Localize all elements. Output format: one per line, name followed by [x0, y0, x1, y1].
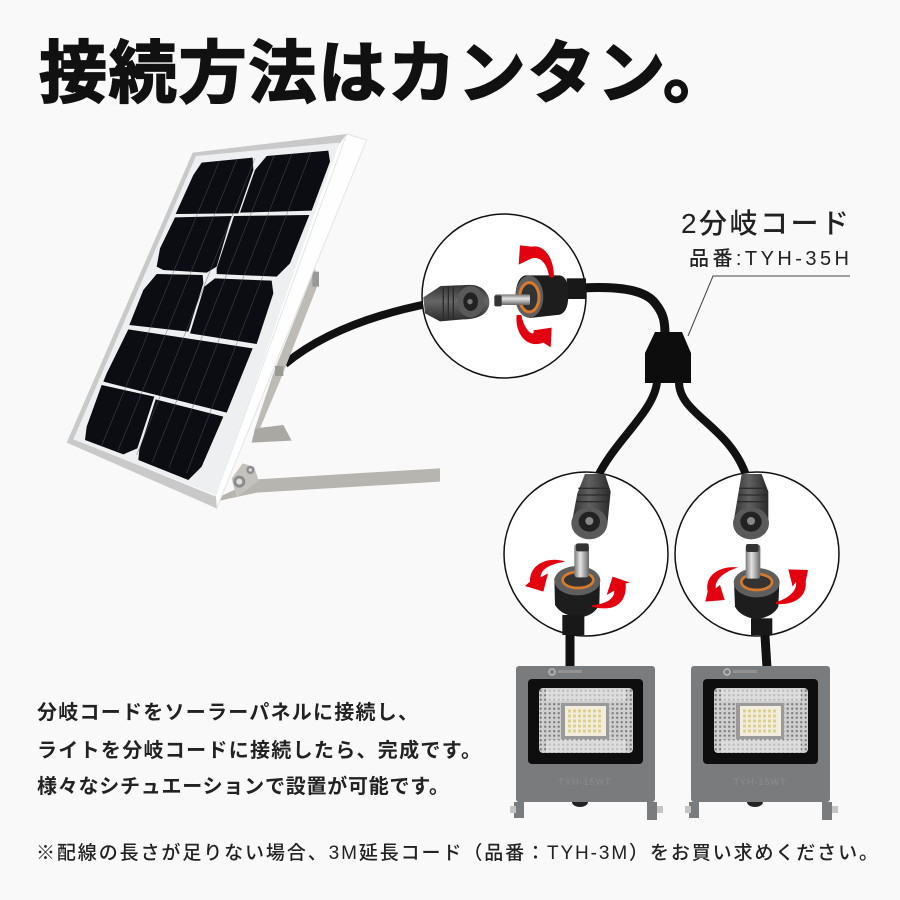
label: splitter cord: 2分岐コード: [681, 208, 849, 239]
solar panel on stand: [67, 134, 440, 508]
icon: socket connector: [423, 285, 489, 321]
icon: rotate arrow: [592, 577, 630, 608]
floodlight left: [510, 666, 663, 820]
solar cells: [85, 151, 330, 480]
stand: [220, 268, 440, 501]
cable: right branch: [679, 382, 747, 478]
cable: panel to first connector: [285, 303, 432, 364]
icon: rotate arrow: [776, 569, 808, 604]
frame: [67, 134, 367, 508]
description text: [37, 701, 481, 798]
icon: rotate arrow: [525, 560, 565, 592]
icon: socket connector: [733, 474, 769, 539]
icon: plug connector: [554, 543, 600, 635]
icon: plug connector: [494, 275, 586, 318]
icon: rotate arrow down: [516, 315, 552, 347]
icon: plug connector: [734, 544, 780, 635]
cable: connector to splitter: [582, 288, 665, 336]
icon: rotate arrow: [705, 567, 738, 602]
icon: rotate arrow up: [519, 245, 554, 277]
detail circle: right light connection: [675, 472, 839, 636]
detail circle: panel connection: [422, 214, 586, 378]
title: 接続方法はカンタン。: [39, 36, 731, 112]
cell grid lines: [102, 152, 311, 473]
description text: 分岐コードをソーラーパネルに接続し、: [37, 701, 418, 724]
cable: to right floodlight: [764, 620, 767, 668]
icon: socket connector: [571, 474, 611, 539]
cable: to left floodlight: [566, 620, 574, 668]
footnote: ※配線の長さが足りない場合、3M延長コード（品番：TYH-3M）をお買い求めください。: [36, 842, 878, 864]
label: part number: 品番:TYH-35H: [689, 247, 849, 270]
description text: ライトを分岐コードに接続したら、完成です。: [37, 738, 481, 762]
description text: 様々なシチュエーションで設置が可能です。: [37, 774, 449, 798]
cable: left branch: [597, 382, 657, 478]
callout line: [688, 276, 850, 336]
detail circle: left light connection: [504, 472, 668, 636]
splitter box: [645, 332, 691, 383]
floodlight right: [685, 666, 838, 820]
